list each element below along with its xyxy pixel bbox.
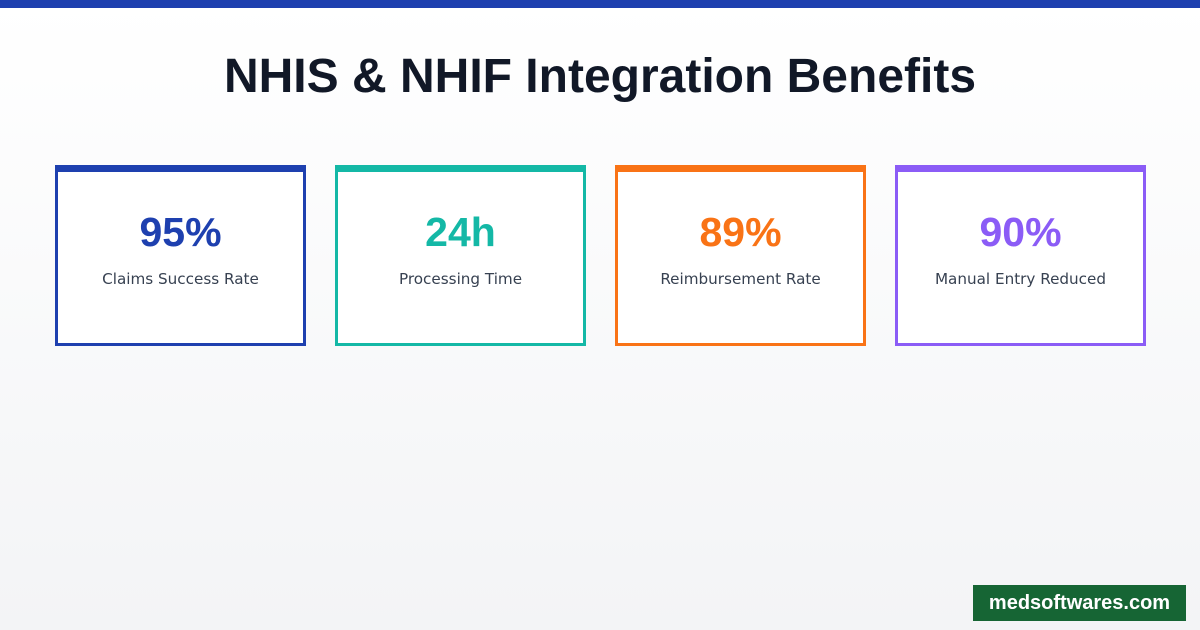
panel: reimbursement: 89% bbox=[699, 209, 782, 255]
panel: manual entry: Manual Entry Reduced bbox=[935, 270, 1106, 288]
brand badge bbox=[973, 585, 1186, 621]
panel: reimbursement: Reimbursement Rate bbox=[660, 270, 821, 288]
title: NHIS & NHIF Integration Benefits bbox=[224, 50, 976, 103]
panel: claims success: 95% bbox=[139, 209, 222, 255]
panel: claims success: Claims Success Rate bbox=[102, 270, 259, 288]
panel: manual entry: 90% bbox=[979, 209, 1062, 255]
panel: reimbursement bbox=[615, 165, 866, 346]
panel: claims success bbox=[55, 165, 306, 346]
brand badge: medsoftwares.com bbox=[989, 592, 1170, 614]
panel: processing time: 24h bbox=[425, 209, 496, 255]
panel: manual entry bbox=[895, 165, 1146, 346]
panel: processing time bbox=[335, 165, 586, 346]
panel: processing time: Processing Time bbox=[399, 270, 522, 288]
